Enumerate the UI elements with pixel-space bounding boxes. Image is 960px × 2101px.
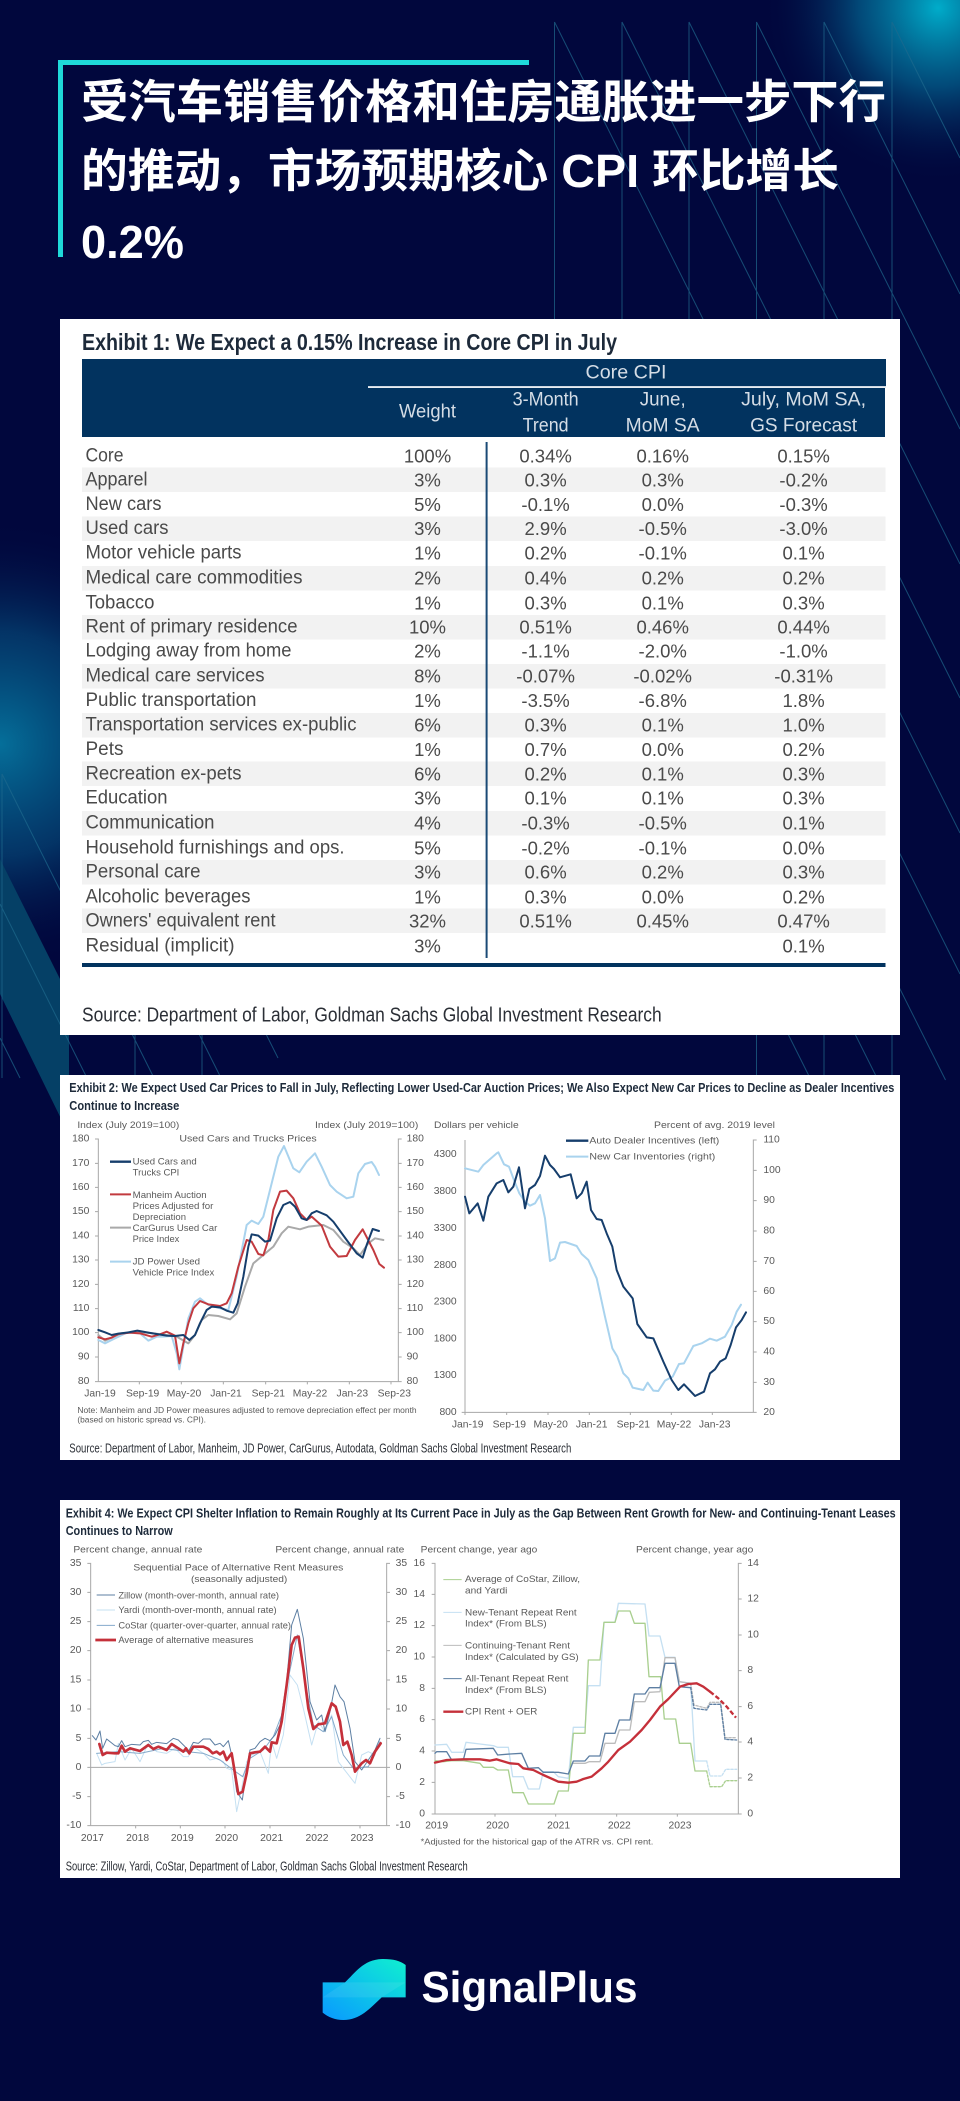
chart: dealer incentives and inventories: 20 [763,1407,775,1418]
chart: used cars and trucks prices: 180 [407,1133,424,1144]
exhibit 4 heading: Continues to Narrow [66,1523,173,1538]
table rows: Education [86,788,168,808]
chart: sequential pace of alternative rent measures: 2018 [126,1833,149,1844]
chart: used cars and trucks prices: 140 [72,1230,90,1241]
table rows: Used cars [86,518,168,539]
line: Manheim [98,1191,384,1363]
chart: dealer incentives and inventories: Jan-23 [699,1419,731,1430]
table rows: 0.2% [525,764,567,784]
exhibit 1 heading: Exhibit 1: We Expect a 0.15% Increase in Core CPI in July [82,329,617,355]
chart: year-over-year rent indices: 4 [419,1745,425,1756]
table rows [86,446,833,956]
table rows: 10% [409,616,446,638]
table rows: 0.3% [525,886,567,908]
table rows: 0.2% [642,568,684,588]
chart: used cars and trucks prices: 110 [73,1303,90,1314]
chart: used cars and trucks prices: Sep-23 [378,1388,411,1399]
legend: Vehicle Price Index [133,1268,215,1278]
table rows: -6.8% [639,690,687,711]
chart: used cars and trucks prices: Jan-19 [84,1388,116,1399]
chart: sequential pace of alternative rent measures: 5 [396,1733,402,1744]
table rows: 1% [414,690,441,711]
chart: year-over-year rent indices: 2022 [608,1820,631,1831]
table rows: 5% [414,494,441,515]
chart: used cars and trucks prices: 120 [72,1279,90,1290]
table rows: Recreation ex-pets [86,764,242,784]
table rows: 0.0% [642,494,684,515]
chart: dealer incentives and inventories: Percent of avg. 2019 level [654,1120,775,1130]
table rows: 0.2% [783,886,825,908]
chart: dealer incentives and inventories: 3800 [434,1186,457,1197]
exhibit 2 heading [69,1080,894,1113]
table rows: -0.3% [521,812,570,834]
chart: used cars and trucks prices: 80 [407,1376,418,1387]
table rows: 1% [414,739,441,760]
wordmark: SignalPlus [422,1963,638,2012]
chart: year-over-year rent indices: 2 [747,1772,753,1783]
table rows: 0.51% [519,910,572,932]
chart: year-over-year rent indices: 8 [419,1683,425,1694]
chart: dealer incentives and inventories: Jan-19 [452,1419,484,1430]
legend: All-Tenant Repeat Rent [465,1673,569,1683]
table rows: 0.2% [525,542,567,564]
chart: year-over-year rent indices: Percent change, year ago [421,1545,537,1555]
table rows: 3% [414,470,441,490]
chart: year-over-year rent indices: 12 [414,1620,425,1631]
table rows: Public transportation [86,690,256,711]
exhibit 2 heading: Continue to Increase [69,1098,179,1113]
chart: year-over-year rent indices [414,1545,759,1846]
chart: sequential pace of alternative rent measures: 0 [396,1762,402,1773]
chart: dealer incentives and inventories: 110 [763,1134,780,1145]
legend: CoStar (quarter-over-quarter, annual rate) [118,1620,291,1630]
title accent bracket [58,60,529,257]
table rows: -2.0% [639,640,687,662]
chart: sequential pace of alternative rent measures: Percent change, annual rate [73,1545,202,1555]
table rows: 0.1% [642,764,684,784]
table rows: 2% [414,568,441,588]
chart: used cars and trucks prices: Index (July 2019=100) [77,1120,179,1130]
chart: dealer incentives and inventories: May-20 [533,1419,568,1430]
table rows: 5% [414,838,441,858]
legend: New-Tenant Repeat Rent [465,1607,577,1617]
line: Zillow [92,1609,380,1800]
table rows: 4% [414,812,441,834]
chart: sequential pace of alternative rent measures: 35 [70,1558,82,1569]
table rows: -0.2% [779,470,828,490]
chart: used cars and trucks prices: 150 [72,1206,90,1217]
chart: year-over-year rent indices: 8 [747,1665,753,1676]
line: new car inventories [465,1152,741,1391]
legend: New Car Inventories (right) [589,1152,715,1162]
chart note: Note: Manheim and JD Power measures adjusted to remove depreciation effect per month [77,1406,417,1415]
table rows: 0.3% [525,714,567,736]
chart: sequential pace of alternative rent measures: 2019 [171,1833,194,1844]
chart: sequential pace of alternative rent measures: 0 [76,1762,82,1773]
legend: Zillow (month-over-month, annual rate) [118,1590,279,1600]
legend: JD Power Used [133,1257,200,1267]
table rows: 0.3% [525,592,567,614]
chart: sequential pace of alternative rent measures: 10 [396,1703,407,1714]
table header: GS Forecast [750,416,858,436]
chart: sequential pace of alternative rent measures: 35 [396,1558,407,1569]
chart: dealer incentives and inventories: 80 [763,1225,775,1236]
legend: Yardi (month-over-month, annual rate) [118,1605,277,1615]
chart: used cars and trucks prices: 110 [407,1303,423,1314]
chart: year-over-year rent indices: 6 [419,1714,425,1725]
table rows: Transportation services ex-public [86,714,356,736]
table rows: 1.0% [783,714,825,736]
table rows: 0.15% [777,446,830,466]
legend: CPI Rent + OER [465,1707,538,1717]
chart: year-over-year rent indices: 0 [419,1808,425,1819]
legend [110,1157,217,1278]
table header: Trend [523,416,569,436]
line: Yardi [97,1675,375,1812]
table rows: 3% [414,862,441,882]
table header [82,359,886,437]
chart: year-over-year rent indices: 14 [747,1558,759,1569]
chart: dealer incentives and inventories: 70 [763,1256,775,1267]
panel: exhibit 4 [60,1500,900,1878]
legend: Index* (From BLS) [465,1685,547,1695]
table rows: Household furnishings and ops. [86,838,344,858]
chart: used cars and trucks prices: 90 [407,1351,418,1362]
table rows: Tobacco [86,592,154,614]
legend: Depreciation [133,1212,186,1222]
line: average of alternative measures [99,1637,381,1794]
chart: sequential pace of alternative rent measures [66,1545,411,1844]
chart: used cars and trucks prices: 80 [78,1376,90,1387]
chart: dealer incentives and inventories: 30 [763,1377,775,1388]
table header: MoM SA [626,416,700,436]
chart: sequential pace of alternative rent measures: 20 [70,1645,82,1656]
chart: year-over-year rent indices: 2020 [486,1820,509,1831]
table rows: Owners' equivalent rent [86,910,276,932]
legend: Trucks CPI [133,1168,179,1178]
table rows: -0.31% [774,666,833,686]
chart: sequential pace of alternative rent measures: 2021 [260,1833,283,1844]
chart: used cars and trucks prices: 100 [72,1327,90,1338]
chart: sequential pace of alternative rent measures: -10 [66,1820,82,1831]
table rows: 0.1% [525,788,567,808]
legend: Price Index [133,1234,180,1244]
legend: Average of CoStar, Zillow, [465,1574,580,1584]
exhibit 4 source: Source: Zillow, Yardi, CoStar, Department of Labor, Goldman Sachs Global Investment Research [66,1859,468,1873]
legend: Auto Dealer Incentives (left) [589,1136,719,1146]
table rows: 0.0% [642,739,684,760]
table rows: 2.9% [525,518,567,539]
table rows: 0.3% [783,592,825,614]
table rows: 0.1% [642,592,684,614]
table rows: 0.4% [525,568,567,588]
table rows: 0.3% [783,862,825,882]
table rows: 32% [409,910,446,932]
table rows: -0.1% [639,542,687,564]
table rows: 0.45% [636,910,689,932]
chart: used cars and trucks prices: Index (July 2019=100) [315,1120,418,1130]
chart: used cars and trucks prices: 160 [72,1182,90,1193]
table rows: Personal care [86,862,200,882]
table stripes [82,468,886,933]
table rows: 3% [414,788,441,808]
table rows: -0.2% [521,838,570,858]
chart: used cars and trucks prices: Jan-23 [337,1388,368,1399]
chart: used cars and trucks prices: 120 [407,1279,424,1290]
table rows: 0.51% [519,616,572,638]
chart: dealer incentives and inventories: 2800 [434,1260,457,1271]
table rows: -0.5% [639,518,687,539]
chart: sequential pace of alternative rent measures: 20 [396,1645,407,1656]
table rows: 0.1% [783,812,825,834]
legend: Manheim Auction [133,1190,207,1200]
exhibit 1 source: Source: Department of Labor, Goldman Sachs Global Investment Research [82,1005,662,1027]
chart: used cars and trucks prices: May-22 [293,1388,327,1399]
chart: dealer incentives and inventories: Jan-21 [576,1419,608,1430]
table rows: 0.6% [525,862,567,882]
chart: dealer incentives and inventories: Dollars per vehicle [434,1120,519,1130]
table rows: -3.0% [779,518,828,539]
table rows: -0.5% [639,812,687,834]
chart: sequential pace of alternative rent measures: 30 [70,1587,82,1598]
table rows: 0.2% [783,739,825,760]
table rows: New cars [86,494,162,515]
title [81,76,886,268]
chart: used cars and trucks prices: Sep-19 [126,1388,160,1399]
table rows: 0.3% [783,788,825,808]
chart: dealer incentives and inventories: 60 [763,1286,775,1297]
exhibit 2 source: Source: Department of Labor, Manheim, JD Power, CarGurus, Autodata, Goldman Sachs Global Investment Research [69,1441,571,1455]
chart: used cars and trucks prices: 160 [407,1182,424,1193]
table rows: 8% [414,666,441,686]
table rows: Rent of primary residence [86,616,298,638]
chart: year-over-year rent indices: 10 [414,1651,425,1662]
chart: year-over-year rent indices: 2 [419,1777,425,1788]
chart: used cars and trucks prices: 170 [407,1158,424,1169]
table rows: 3% [414,936,441,956]
chart: used cars and trucks prices: Jan-21 [210,1388,242,1399]
chart: year-over-year rent indices: 2021 [547,1820,570,1831]
table rows: 100% [404,446,451,466]
table rows: 1% [414,592,441,614]
table header: 3-Month [513,390,579,410]
table rows: -1.0% [779,640,828,662]
chart: sequential pace of alternative rent measures: 10 [70,1703,82,1714]
table rows: 6% [414,764,441,784]
table rows: 2% [414,640,441,662]
table rows: 0.0% [783,838,825,858]
table rows: Alcoholic beverages [86,886,250,908]
chart: used cars and trucks prices: Sep-21 [252,1388,285,1399]
table rows: Pets [86,739,124,760]
legend: Prices Adjusted for [133,1201,213,1211]
chart: used cars and trucks prices: 170 [72,1158,90,1169]
table rows: 3% [414,518,441,539]
chart: sequential pace of alternative rent measures: 2020 [215,1833,238,1844]
chart: used cars and trucks prices: May-20 [167,1388,201,1399]
chart: sequential pace of alternative rent measures: 2023 [351,1833,374,1844]
chart: sequential pace of alternative rent measures: 2017 [81,1833,104,1844]
table rows: 0.1% [783,542,825,564]
table rows: Apparel [86,470,148,490]
chart: sequential pace of alternative rent measures: 25 [70,1616,82,1627]
table rows: Core [86,446,124,466]
table rows: 0.2% [642,862,684,882]
table rows: 0.44% [777,616,830,638]
legend [95,1590,291,1645]
chart: sequential pace of alternative rent measures: 15 [70,1674,82,1685]
title: 受汽车销售价格和住房通胀进一步下行 [81,76,886,128]
legend: Continuing-Tenant Rent [465,1640,570,1650]
table rows: 0.34% [519,446,572,466]
chart: dealer incentives and inventories: 3300 [434,1223,457,1234]
exhibit 4 heading [66,1506,896,1538]
table rows: -0.07% [516,666,575,686]
line: auto dealer incentives [465,1156,746,1396]
chart note [77,1406,417,1424]
chart: dealer incentives and inventories: May-22 [657,1419,691,1430]
chart: year-over-year rent indices: 12 [747,1593,759,1604]
chart: year-over-year rent indices: 2023 [669,1820,692,1831]
table rows: 0.1% [642,714,684,736]
chart: year-over-year rent indices: 2019 [425,1820,448,1831]
chart: sequential pace of alternative rent measures: 25 [396,1616,407,1627]
chart: dealer incentives and inventories: 4300 [434,1149,457,1160]
table rows: 0.3% [525,470,567,490]
logo: SignalPlus [323,1959,638,2020]
icon: SignalPlus mark [323,1959,406,2020]
legend: Used Cars and [133,1157,197,1167]
table header: Core CPI [586,362,666,384]
chart: dealer incentives and inventories [434,1120,781,1430]
legend: CarGurus Used Car [133,1223,217,1233]
chart: sequential pace of alternative rent measures: Percent change, annual rate [275,1545,404,1555]
table rows: -1.1% [521,640,570,662]
table rows: Motor vehicle parts [86,542,242,564]
line: CoStar [97,1635,380,1777]
chart: dealer incentives and inventories: 50 [763,1316,775,1327]
chart: year-over-year rent indices: 0 [747,1808,753,1819]
title: 的推动，市场预期核心 CPI 环比增长 [81,145,839,197]
table rows: 1% [414,886,441,908]
chart: used cars and trucks prices: 130 [407,1254,424,1265]
table rows: 0.16% [636,446,689,466]
panel: exhibit 2 [60,1075,900,1460]
line: average of CoStar, Zillow and Yardi [435,1611,737,1804]
legend [443,1574,580,1717]
line: used cars CPI [98,1202,379,1340]
table rows: 0.1% [642,788,684,808]
chart: sequential pace of alternative rent measures: -10 [396,1820,411,1831]
table rows: -0.3% [779,494,828,515]
table rows: -0.02% [633,666,692,686]
chart: dealer incentives and inventories: 90 [763,1195,775,1206]
panel: exhibit 1 table [60,319,900,1035]
chart: dealer incentives and inventories: 1800 [434,1333,457,1344]
chart: year-over-year rent indices: 16 [414,1558,425,1569]
chart: dealer incentives and inventories: Sep-19 [493,1419,526,1430]
table rows: Medical care commodities [86,568,302,588]
table rows: -3.5% [521,690,570,711]
chart: sequential pace of alternative rent measures: 2022 [306,1833,329,1844]
chart: year-over-year rent indices: 4 [747,1736,753,1747]
line: new-tenant repeat rent [435,1603,737,1789]
table rows: Residual (implicit) [86,936,234,956]
table rows: 6% [414,714,441,736]
chart: used cars and trucks prices: 140 [407,1230,424,1241]
chart: sequential pace of alternative rent measures: (seasonally adjusted) [191,1574,287,1584]
chart footnote: *Adjusted for the historical gap of the ATRR vs. CPI rent. [421,1836,653,1846]
chart: dealer incentives and inventories: 100 [763,1165,781,1176]
chart: year-over-year rent indices: 10 [747,1629,759,1640]
chart: dealer incentives and inventories: 40 [763,1346,775,1357]
table rows: Lodging away from home [86,640,292,662]
table rows: Medical care services [86,666,264,686]
line: CarGurus [98,1225,383,1343]
table rows: 0.7% [525,739,567,760]
chart: year-over-year rent indices: 14 [414,1589,425,1600]
table rows: -0.1% [521,494,570,515]
title: 0.2% [81,216,184,268]
chart note: (based on historic spread vs. CPI). [77,1415,206,1424]
line: JD Power [98,1146,379,1369]
line: all-tenant repeat rent [435,1663,737,1774]
legend: Average of alternative measures [118,1635,254,1645]
chart: dealer incentives and inventories: Sep-21 [617,1419,650,1430]
line: continuing-tenant rent [573,1658,737,1763]
table rows: 0.1% [783,936,825,956]
chart: year-over-year rent indices: 6 [747,1701,753,1712]
chart: dealer incentives and inventories: 1300 [434,1370,457,1381]
table rows: -0.1% [639,838,687,858]
chart: used cars and trucks prices: Used Cars and Trucks Prices [179,1133,317,1143]
chart: sequential pace of alternative rent measures: -5 [396,1791,405,1802]
chart: used cars and trucks prices: 150 [407,1206,424,1217]
chart: year-over-year rent indices: Percent change, year ago [636,1545,753,1555]
table rows: 0.0% [642,886,684,908]
table rows: Communication [86,812,214,834]
chart: used cars and trucks prices: 90 [78,1351,90,1362]
table rows: 1.8% [783,690,825,711]
chart: sequential pace of alternative rent measures: 5 [76,1733,82,1744]
chart: used cars and trucks prices: 130 [72,1254,90,1265]
chart: dealer incentives and inventories: 800 [439,1407,457,1418]
legend: Index* (Calculated by GS) [465,1652,579,1662]
legend: Index* (From BLS) [465,1619,547,1629]
chart: dealer incentives and inventories: 2300 [434,1296,457,1307]
table rows: 0.2% [783,568,825,588]
line: CPI rent + OER [435,1683,736,1783]
chart: sequential pace of alternative rent measures: 15 [396,1674,407,1685]
chart: used cars and trucks prices: 100 [407,1327,424,1338]
table rows: 0.47% [777,910,830,932]
chart: sequential pace of alternative rent measures: 30 [396,1587,407,1598]
table header: June, [640,390,686,410]
table rows: 0.3% [642,470,684,490]
chart: sequential pace of alternative rent measures: Sequential Pace of Alternative Rent Measures [133,1562,344,1572]
legend [566,1136,719,1162]
table rows: 0.46% [636,616,689,638]
chart: used cars and trucks prices [72,1120,424,1424]
chart: used cars and trucks prices: 180 [72,1133,90,1144]
legend: and Yardi [465,1586,507,1596]
table rows: 1% [414,542,441,564]
table rows: 0.3% [783,764,825,784]
chart: sequential pace of alternative rent measures: -5 [72,1791,82,1802]
table header: Weight [399,402,457,422]
table header: July, MoM SA, [741,390,866,410]
